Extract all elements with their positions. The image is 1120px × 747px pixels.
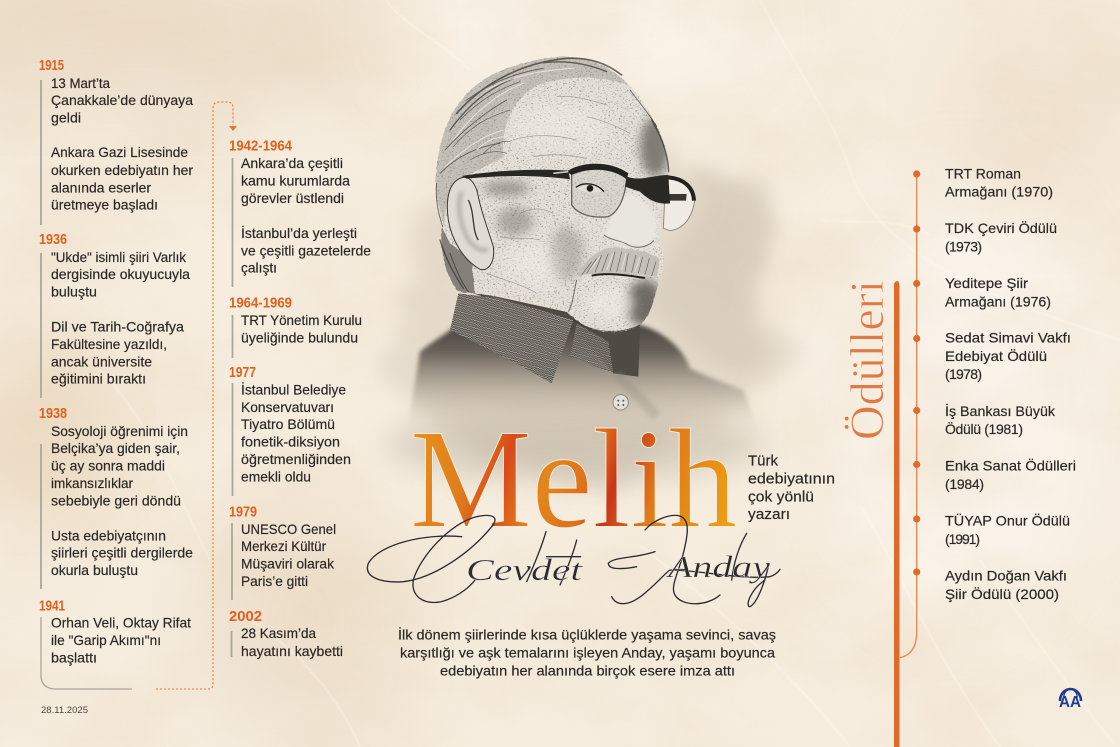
entry 1942-1964 <box>229 138 371 287</box>
entry 1936: "Ukde" isimli şiiri Varlık <box>51 249 187 265</box>
icon: AA logo: AA <box>1059 694 1081 711</box>
award: TDK Çeviri Ödülü: (1973) <box>945 238 982 254</box>
tagline: çok yönlü <box>748 490 814 506</box>
award: TRT Roman Armağanı: TRT Roman <box>945 166 1021 182</box>
entry 1938: imkansızlıklar <box>51 475 133 491</box>
shirt placket <box>617 373 657 417</box>
portrait of Melih Cevdet Anday <box>410 56 751 420</box>
entry 1915: 1915 <box>39 57 64 74</box>
award: Sedat Simavi Vakfı: (1978) <box>945 366 982 382</box>
shading <box>640 117 670 177</box>
entry 1979: UNESCO Genel <box>241 521 336 537</box>
award: Enka Sanat Ödülleri <box>913 456 1076 492</box>
entry 1941: 1941 <box>39 598 65 614</box>
heading: Ödülleri: Ödülleri <box>841 280 894 440</box>
entry 1936: Fakültesine yazıldı, <box>51 336 167 352</box>
award: Sedat Simavi Vakfı: Sedat Simavi Vakfı <box>945 330 1071 346</box>
entry 1979 <box>229 504 336 600</box>
entry 1938: Sosyoloji öğrenimi için <box>51 423 188 439</box>
entry 1979: Müşaviri olarak <box>241 556 335 572</box>
entry 2002 <box>229 608 343 659</box>
temple arm <box>462 170 570 179</box>
entry 1964-1969: 1964-1969 <box>229 294 292 312</box>
entry 1938: üç ay sonra maddi <box>51 458 165 474</box>
award: İş Bankası Büyük Ödülü <box>913 402 1056 437</box>
panel: timeline left column <box>39 57 193 689</box>
shirt and shoulders <box>407 317 760 433</box>
collar tweed <box>450 293 613 383</box>
title: Melih: Melih <box>410 400 737 558</box>
hair mass <box>436 57 633 227</box>
award: Yeditepe Şiir Armağanı <box>913 275 1051 310</box>
entry 1977 <box>229 364 351 496</box>
entry 1964-1969: TRT Yönetim Kurulu <box>241 312 362 328</box>
entry 1915: Çanakkale’de dünyaya <box>51 92 193 108</box>
entry 1977: emekli oldu <box>241 468 311 484</box>
hair strokes <box>436 58 669 292</box>
entry 1941: başlattı <box>51 650 97 666</box>
panel: awards list <box>913 166 1076 602</box>
near lens <box>572 166 627 217</box>
date: 28.11.2025 <box>41 705 88 716</box>
side hair <box>440 226 476 294</box>
entry 1915: Ankara Gazi Lisesinde <box>51 144 188 160</box>
award: Enka Sanat Ödülleri: (1984) <box>945 476 984 492</box>
skin grain texture <box>430 53 673 337</box>
eye <box>577 185 603 193</box>
entry 1979: Merkezi Kültür <box>241 538 326 554</box>
subtitle: Cevdet Anday signature <box>367 515 780 607</box>
award: Aydın Doğan Vakfı: Aydın Doğan Vakfı <box>945 568 1067 584</box>
panel: timeline right column <box>229 138 371 659</box>
award: TÜYAP Onur Ödülü: (1991) <box>945 531 980 547</box>
neck <box>458 288 640 377</box>
head <box>435 56 668 332</box>
award: Aydın Doğan Vakfı: Şiir Ödülü (2000) <box>945 585 1059 602</box>
entry 1977: Tiyatro Bölümü <box>241 416 335 432</box>
bridge <box>625 175 670 204</box>
entry 1977: öğretmenliğinden <box>241 451 351 467</box>
entry 1936: Dil ve Tarih-Coğrafya <box>51 318 184 334</box>
award: Yeditepe Şiir Armağanı: Armağanı (1976) <box>945 294 1051 310</box>
award: TDK Çeviri Ödülü <box>913 219 1057 254</box>
entry 1942-1964: çalıştı <box>241 260 277 276</box>
entry 1915 <box>39 57 193 225</box>
arrow: dotted connector to second column <box>156 102 237 689</box>
entry 1938: 1938 <box>39 405 67 422</box>
entry 1936: ancak üniversite <box>51 354 152 370</box>
subtitle: Cevdet Anday signature: Anday <box>665 549 770 584</box>
entry 1977: 1977 <box>229 364 256 381</box>
entry 1915: alanında eserler <box>51 180 151 196</box>
description paragraph <box>398 626 776 678</box>
entry 1977: İstanbul Belediye <box>241 380 346 398</box>
award: Yeditepe Şiir Armağanı: Yeditepe Şiir <box>945 275 1028 291</box>
ear <box>447 177 494 270</box>
description paragraph: karşıtlığı ve aşk temalarını işleyen Anday, yaşamı boyunca <box>400 644 775 660</box>
entry 1938: Usta edebiyatçının <box>51 528 166 544</box>
entry 1936: buluştu <box>51 284 97 300</box>
entry 1977: Konservatuvarı <box>241 399 334 415</box>
award: TDK Çeviri Ödülü: TDK Çeviri Ödülü <box>945 219 1057 236</box>
moustache <box>577 247 660 278</box>
tagline: edebiyatının <box>748 472 835 488</box>
entry 2002: 28 Kasım’da <box>241 625 316 641</box>
award: Enka Sanat Ödülleri: Enka Sanat Ödülleri <box>945 456 1076 474</box>
award: TÜYAP Onur Ödülü <box>913 512 1070 547</box>
entry 1915: okurken edebiyatın her <box>51 162 193 178</box>
award: İş Bankası Büyük Ödülü: İş Bankası Büyük <box>945 402 1056 419</box>
forehead wrinkles and creases <box>487 96 630 293</box>
entry 1977: fonetik-diksiyon <box>241 434 340 450</box>
award: TRT Roman Armağanı: Armağanı (1970) <box>945 184 1053 200</box>
entry 1979: 1979 <box>229 504 257 520</box>
award: Aydın Doğan Vakfı <box>913 568 1067 602</box>
jaw line <box>568 280 640 331</box>
entry 1915: geldi <box>51 110 81 126</box>
tagline <box>748 454 835 523</box>
entry 1942-1964: Ankara’da çeşitli <box>241 155 343 171</box>
entry 1915: 13 Mart’ta <box>51 75 110 91</box>
button <box>613 395 628 410</box>
entry 2002: 2002 <box>229 608 262 625</box>
watercolor wash behind portrait <box>385 140 785 481</box>
subtitle: Cevdet Anday signature: Cevdet <box>466 552 584 587</box>
entry 1964-1969: üyeliğinde bulundu <box>241 330 358 346</box>
entry 1938: sebebiyle geri döndü <box>51 492 181 508</box>
entry 2002: hayatını kaybetti <box>241 643 343 659</box>
entry 1941: Orhan Veli, Oktay Rifat <box>51 614 191 630</box>
entry 1964-1969 <box>229 294 362 358</box>
entry 1938: okurla buluştu <box>51 562 138 578</box>
entry 1938 <box>39 405 193 589</box>
light hair streaks <box>445 68 573 167</box>
award: Sedat Simavi Vakfı <box>913 330 1071 382</box>
award: İş Bankası Büyük Ödülü: Ödülü (1981) <box>945 420 1023 437</box>
far lens <box>663 177 695 231</box>
entry 1942-1964: İstanbul’da yerleşti <box>241 224 357 241</box>
entry 1942-1964: kamu kurumlarda <box>241 172 350 188</box>
award: TRT Roman Armağanı <box>913 166 1053 200</box>
nose <box>604 192 658 248</box>
glasses <box>462 164 695 231</box>
entry 1936 <box>39 231 190 398</box>
entry 1942-1964: ve çeşitli gazetelerde <box>241 242 371 258</box>
entry 1936: eğitimini bıraktı <box>51 370 146 386</box>
entry 1936: dergisinde okuyucuyla <box>51 266 190 282</box>
entry 1942-1964: görevler üstlendi <box>241 190 344 206</box>
description paragraph: edebiyatın her alanında birçok esere imza attı <box>440 662 735 678</box>
awards rail <box>894 174 917 747</box>
entry 1942-1964: 1942-1964 <box>229 138 293 154</box>
entry 1936: 1936 <box>39 231 67 248</box>
entry 1915: üretmeye başladı <box>51 196 158 212</box>
award: Sedat Simavi Vakfı: Edebiyat Ödülü <box>945 347 1047 364</box>
entry 1938: Belçika’ya giden şair, <box>51 440 180 456</box>
entry 1941 <box>39 598 191 689</box>
entry 1979: Paris’e gitti <box>241 573 308 589</box>
description paragraph: İlk dönem şiirlerinde kısa üçlüklerde yaşama sevinci, savaş <box>398 626 776 642</box>
award: TÜYAP Onur Ödülü: TÜYAP Onur Ödülü <box>945 512 1070 528</box>
tagline: yazarı <box>748 507 790 523</box>
entry 1938: şiirleri çeşitli dergilerde <box>51 544 193 560</box>
tagline: Türk <box>748 454 779 470</box>
entry 1941: ile "Garip Akımı"nı <box>51 632 161 648</box>
